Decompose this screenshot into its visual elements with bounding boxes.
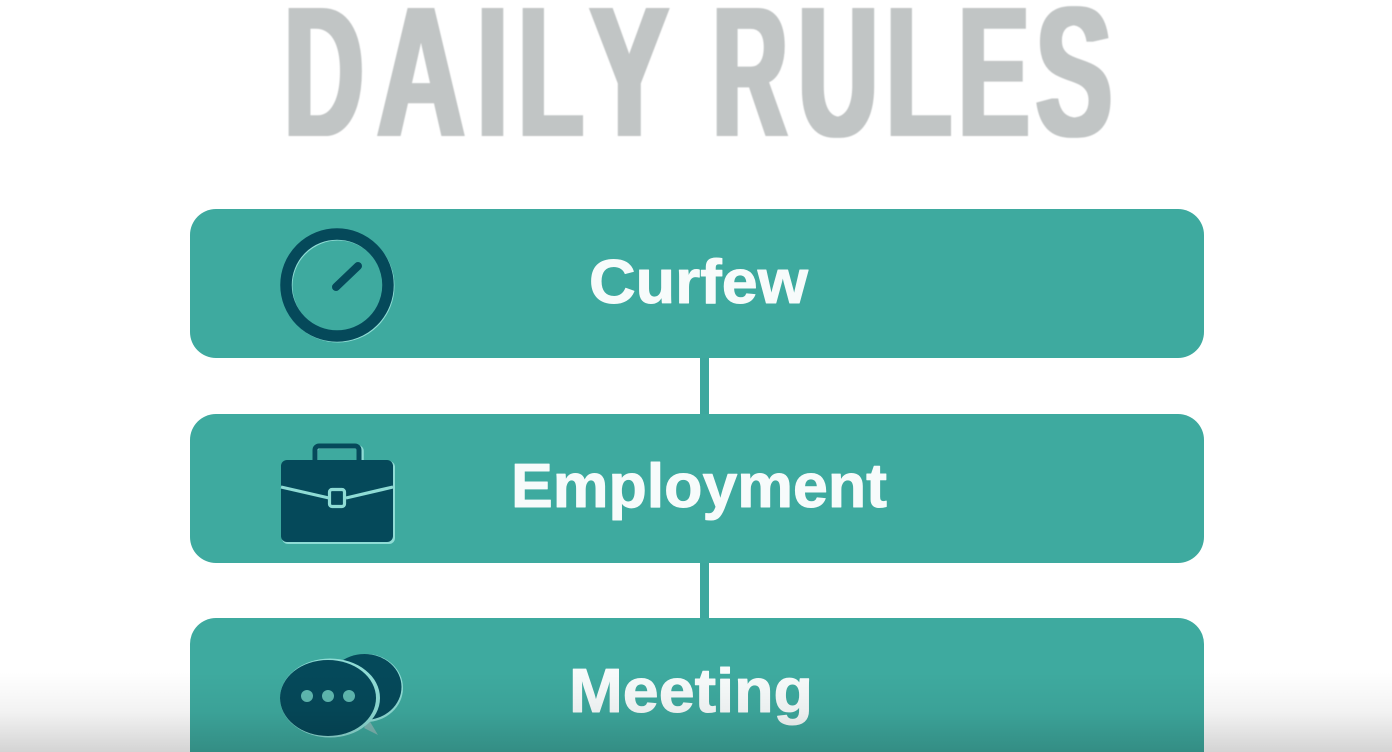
connector: employment to meeting bbox=[700, 560, 709, 622]
label: employment: Employment bbox=[511, 452, 887, 521]
panel: curfew bbox=[190, 209, 1204, 358]
label: meeting: Meeting bbox=[569, 657, 813, 726]
title bbox=[284, 0, 1112, 176]
label: curfew: Curfew bbox=[589, 248, 809, 317]
icon: chat bubbles bbox=[280, 654, 403, 738]
connector: curfew to employment bbox=[700, 355, 709, 417]
panel: employment bbox=[190, 414, 1204, 563]
panel: meeting bbox=[190, 618, 1204, 752]
icon: briefcase bbox=[281, 446, 395, 544]
icon: clock bbox=[286, 234, 389, 337]
